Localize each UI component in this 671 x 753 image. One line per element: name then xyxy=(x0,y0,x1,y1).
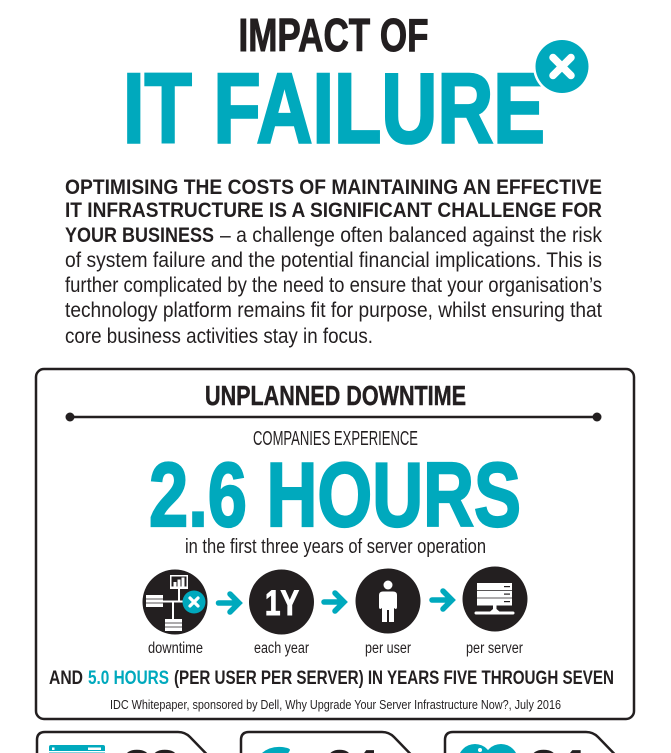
title line: it failure: IT FAILURE xyxy=(123,52,545,164)
stat caption: in the first three years of server operation xyxy=(185,536,486,558)
intro paragraph: – a challenge often balanced against the risk xyxy=(220,224,602,247)
icon labels: downtime xyxy=(148,640,203,657)
lead-in text: COMPANIES EXPERIENCE xyxy=(253,428,418,450)
source citation: IDC Whitepaper, sponsored by Dell, Why Upgrade Your Server Infrastructure Now?, July 2016 xyxy=(110,697,561,712)
arrow 1 xyxy=(218,594,239,612)
icon: downtime network xyxy=(142,570,208,634)
heading rule xyxy=(66,412,602,422)
icon: failure cross badge xyxy=(533,38,591,96)
intro paragraph: IT INFRASTRUCTURE IS A SIGNIFICANT CHALLENGE FOR xyxy=(65,199,602,222)
intro paragraph xyxy=(65,176,602,348)
icon: one year: 1Y xyxy=(265,584,299,623)
intro paragraph: YOUR BUSINESS xyxy=(65,224,214,247)
intro paragraph: further complicated by the need to ensure that your organisation’s xyxy=(65,274,602,297)
arrow 3 xyxy=(432,591,452,609)
icon: user xyxy=(356,568,420,634)
follow-up statement: AND xyxy=(49,667,83,689)
card 2 xyxy=(241,732,426,753)
intro paragraph: of system failure and the potential financial implications. This is xyxy=(65,249,602,272)
title line: impact of: IMPACT OF xyxy=(238,9,428,61)
intro paragraph: OPTIMISING THE COSTS OF MAINTAINING AN EFFECTIVE xyxy=(65,176,602,199)
icon: one year xyxy=(249,570,314,634)
card 1 xyxy=(37,732,222,753)
card 2 icon xyxy=(262,747,290,753)
card 3 icon xyxy=(458,744,518,753)
title xyxy=(123,9,545,164)
icon labels: each year xyxy=(254,640,309,657)
card 1 icon xyxy=(49,745,105,753)
headline stat: 2.6 HOURS xyxy=(149,445,521,546)
card 3 xyxy=(445,732,630,753)
panel heading: UNPLANNED DOWNTIME xyxy=(205,380,466,411)
follow-up statement: 5.0 HOURS xyxy=(88,667,169,689)
icon labels: per server xyxy=(466,640,523,657)
icon labels xyxy=(148,640,523,657)
intro paragraph: core business activities stay in focus. xyxy=(65,325,373,348)
intro paragraph: technology platform remains fit for purpose, whilst ensuring that xyxy=(65,299,602,322)
panel: unplanned downtime xyxy=(36,369,634,719)
icon labels: per user xyxy=(365,640,411,657)
icon: server xyxy=(462,566,528,632)
arrow 2 xyxy=(324,593,344,611)
